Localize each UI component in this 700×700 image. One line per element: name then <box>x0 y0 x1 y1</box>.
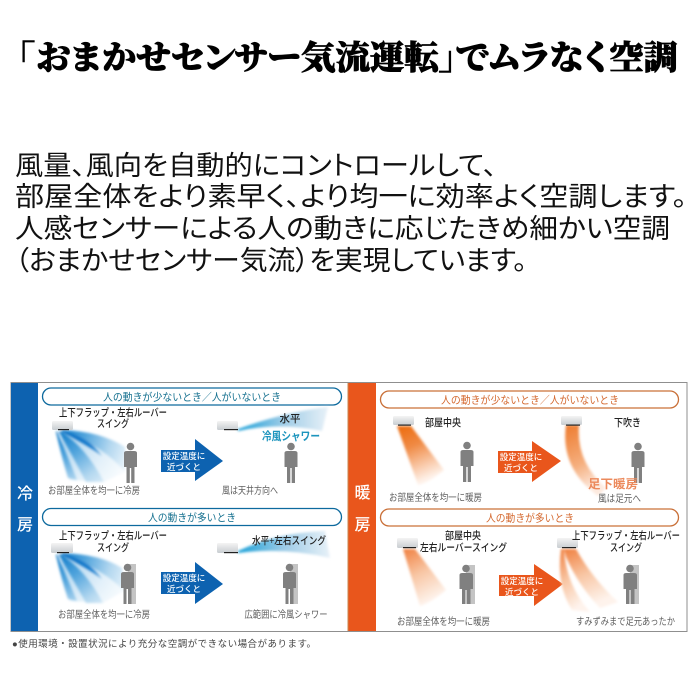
cooling arrow 2: 設定温度に <box>163 573 205 583</box>
cooling side band: 冷 <box>17 485 33 503</box>
heating arrow 2: 近づくと <box>505 587 539 597</box>
cooling scene 4: wide shower airflow: 水平+左右スイング <box>252 534 326 547</box>
heating scene 3: center louver airflow <box>397 529 507 628</box>
cooling scene 2: horizontal airflow: 水平 <box>280 412 300 425</box>
cooling heading: much movement: 人の動きが多いとき <box>148 511 236 524</box>
heating arrow 2 <box>499 564 563 606</box>
cooling scene 3: swing airflow: お部屋全体を均一に冷房 <box>58 608 150 621</box>
heating scene 2: downward airflow: 足下暖房 <box>588 477 638 491</box>
heating scene 2: downward airflow: 風は足元へ <box>598 493 641 505</box>
intro text <box>15 151 687 276</box>
cooling scene 1: swing airflow: お部屋全体を均一に冷房 <box>48 484 140 497</box>
cooling arrow 1: 設定温度に <box>163 451 205 461</box>
intro text: 部屋全体をより素早く、より均一に効率よく空調します。 <box>15 182 687 212</box>
heating scene 4: swing airflow: すみずみまで足元あったか <box>576 616 675 628</box>
footnote: ●使用環境・設置状況により充分な空調ができない場合があります。 <box>12 638 316 650</box>
heating scene 1: center airflow <box>389 416 482 504</box>
intro text: （おまかせセンサー気流）を実現しています。 <box>15 246 527 276</box>
cooling scene 2: horizontal airflow <box>217 407 328 497</box>
heating heading: little movement: 人の動きが少ないとき／人がいないとき <box>441 394 619 406</box>
heating scene 4: swing airflow <box>557 529 680 628</box>
heating scene 1: center airflow: 部屋中央 <box>425 416 461 429</box>
panel: cooling and heating diagram <box>11 382 687 632</box>
panel: heating <box>348 383 680 631</box>
cooling scene 3: swing airflow: 上下フラップ・左右ルーバー <box>59 529 167 542</box>
cooling heading: much movement <box>42 508 342 526</box>
heating scene 3: center louver airflow: 部屋中央 <box>445 529 481 542</box>
cooling scene 4: wide shower airflow: 広範囲に冷風シャワー <box>244 608 328 621</box>
heating heading: much movement: 人の動きが多いとき <box>486 512 574 524</box>
heating scene 2: downward airflow: 下吹き <box>614 416 641 429</box>
heating arrow 1 <box>498 441 561 482</box>
heating scene 2: downward airflow <box>561 416 644 505</box>
cooling scene 3: swing airflow: スイング <box>97 541 129 554</box>
cooling arrow 1: 近づくと <box>167 462 201 472</box>
heating side band: 暖 <box>354 484 371 502</box>
heating arrow 1: 設定温度に <box>500 452 542 462</box>
heating heading: much movement <box>380 509 678 526</box>
cooling heading: little movement <box>42 388 342 405</box>
cooling arrow 2: 近づくと <box>167 584 201 594</box>
cooling arrow 1 <box>161 439 223 481</box>
intro text: 人感センサーによる人の動きに応じたきめ細かい空調 <box>15 214 670 244</box>
cooling scene 2: horizontal airflow: 冷風シャワー <box>262 429 320 443</box>
heating arrow 2: 設定温度に <box>501 576 543 586</box>
panel: cooling <box>11 383 342 631</box>
heating arrow 1: 近づくと <box>504 463 538 473</box>
cooling side band: 房 <box>17 517 33 534</box>
cooling scene 2: horizontal airflow: 風は天井方向へ <box>222 484 278 497</box>
heating scene 3: center louver airflow: 左右ルーバースイング <box>420 541 507 554</box>
heating scene 3: center louver airflow: お部屋全体を均一に暖房 <box>397 615 490 628</box>
cooling scene 1: swing airflow: 上下フラップ・左右ルーバー <box>59 406 167 419</box>
heating heading: little movement <box>380 391 678 408</box>
heating side band <box>348 383 376 631</box>
cooling side band <box>11 383 38 631</box>
title: 「おまかせセンサー気流運転」でムラなく空調 <box>18 40 678 77</box>
heating scene 4: swing airflow: スイング <box>610 541 642 554</box>
heating scene 1: center airflow: お部屋全体を均一に暖房 <box>389 491 482 504</box>
cooling scene 4: wide shower airflow <box>217 531 330 621</box>
cooling scene 3: swing airflow <box>51 529 167 621</box>
heating side band: 房 <box>354 517 371 534</box>
cooling scene 1: swing airflow <box>48 406 167 497</box>
cooling heading: little movement: 人の動きが少ないとき／人がいないとき <box>103 390 281 404</box>
intro text: 風量、風向を自動的にコントロールして、 <box>15 151 497 181</box>
cooling scene 1: swing airflow: スイング <box>97 417 129 430</box>
cooling arrow 2 <box>161 562 223 604</box>
